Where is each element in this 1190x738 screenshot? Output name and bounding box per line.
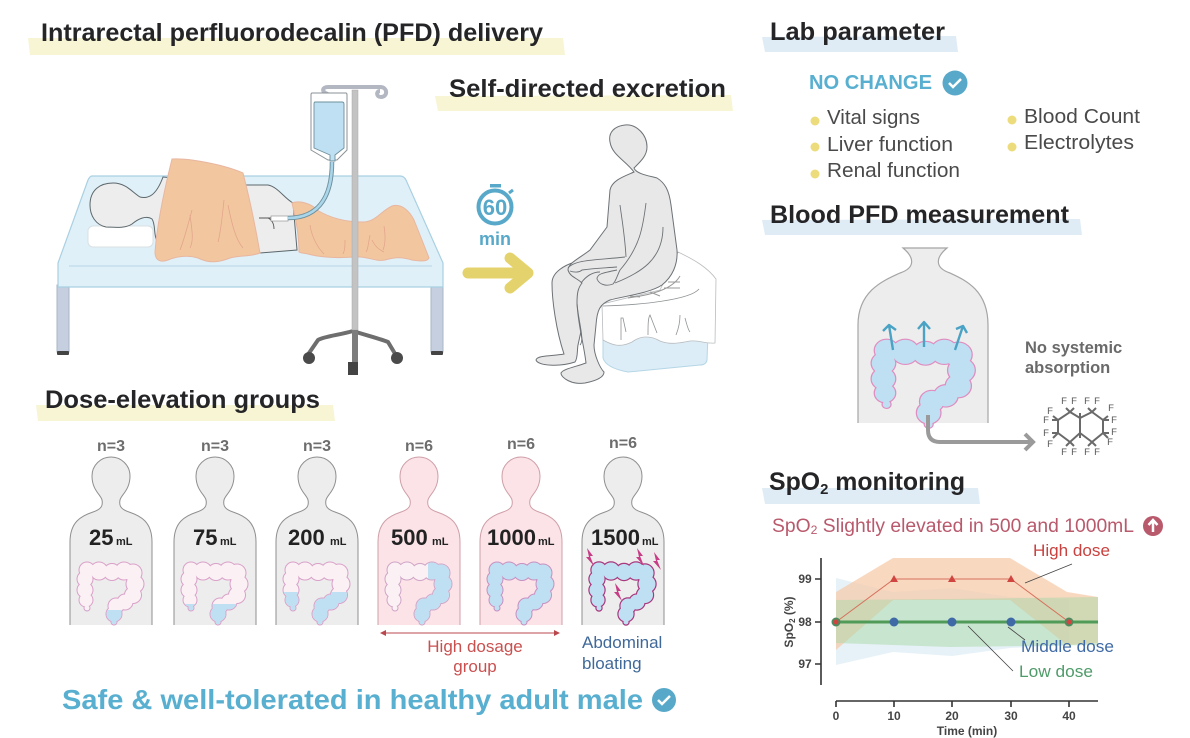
group: 75 mL bbox=[174, 438, 256, 625]
icon: PFD molecule: F bbox=[1111, 427, 1117, 438]
icon: 60 minute stopwatch: min bbox=[479, 229, 511, 249]
label: high dosage group bbox=[380, 630, 560, 676]
icon: PFD molecule: F bbox=[1094, 447, 1100, 458]
list: lab parameters: Liver function bbox=[827, 134, 953, 156]
bed bbox=[57, 176, 443, 355]
group: 200 mL: n=3 bbox=[303, 438, 331, 455]
confidence band: high dose bbox=[836, 558, 1098, 650]
list: lab parameters: Blood Count bbox=[1024, 106, 1140, 128]
label: no systemic absorption: No systemic bbox=[1025, 339, 1122, 357]
confidence band: low dose bbox=[836, 597, 1098, 647]
axis labels: 97 bbox=[798, 657, 812, 671]
group: 25 mL: mL bbox=[116, 536, 133, 548]
commode cover bbox=[602, 252, 716, 345]
icon: PFD molecule bbox=[1043, 396, 1117, 458]
line chart: SpO2 over time bbox=[782, 541, 1114, 738]
icon: PFD molecule: F bbox=[1061, 396, 1067, 407]
low and middle dose series bbox=[832, 618, 1098, 626]
group: 500 mL: n=6 bbox=[405, 438, 433, 455]
icon: PFD molecule: F bbox=[1071, 447, 1077, 458]
excretion arrow bbox=[928, 415, 1033, 450]
group: 25 mL: 25 bbox=[89, 525, 113, 550]
patient body bbox=[90, 177, 297, 253]
axis labels: 30 bbox=[1004, 709, 1018, 723]
illustration: patient on bed with IV bag bbox=[57, 87, 443, 375]
IV stand bbox=[303, 87, 403, 375]
group: 1500 mL bbox=[582, 435, 664, 625]
label: abdominal bloating: bloating bbox=[582, 654, 642, 673]
icon: PFD molecule: F bbox=[1047, 439, 1053, 450]
icon: 60 minute stopwatch: 60 bbox=[483, 195, 507, 220]
blanket: lower bbox=[292, 202, 429, 261]
icon: PFD molecule: F bbox=[1084, 447, 1090, 458]
no change label: NO CHANGE bbox=[809, 72, 932, 94]
group: 1000 mL bbox=[480, 436, 562, 625]
axis labels bbox=[782, 572, 1076, 738]
callout: SpO2 slightly elevated: Slightly elevated in 500 and 1000mL bbox=[817, 516, 1134, 537]
group: 1500 mL: 1500 bbox=[591, 525, 640, 550]
group: 500 mL bbox=[378, 438, 460, 625]
icon: PFD molecule: F bbox=[1107, 437, 1113, 448]
label: high dosage group: High dosage bbox=[427, 637, 523, 656]
group: 200 mL: 200 bbox=[288, 525, 325, 550]
blanket: upper bbox=[155, 159, 260, 262]
axis labels: 40 bbox=[1062, 709, 1076, 723]
illustration: seated person on commode bbox=[536, 125, 716, 383]
icon: PFD molecule: F bbox=[1071, 396, 1077, 407]
axis labels: 10 bbox=[887, 709, 901, 723]
group: 200 mL bbox=[276, 438, 358, 625]
absorption arrows bbox=[883, 322, 967, 350]
icon: PFD molecule: F bbox=[1043, 415, 1049, 426]
torso bbox=[858, 248, 988, 423]
confidence band: middle dose bbox=[836, 578, 1069, 665]
group: 1500 mL: mL bbox=[642, 536, 659, 548]
group: 1500 mL: n=6 bbox=[609, 435, 637, 452]
group: 75 mL: mL bbox=[220, 536, 237, 548]
heading: Self-directed excretion: Self-directed excretion bbox=[449, 75, 726, 103]
list: lab parameters: Vital signs bbox=[827, 107, 920, 129]
series labels: Low dose bbox=[1019, 662, 1093, 681]
group: 500 mL: 500 bbox=[391, 525, 428, 550]
label: high dosage group: group bbox=[453, 657, 497, 676]
group: 75 mL: 75 bbox=[193, 525, 217, 550]
person: head, torso and near leg bbox=[561, 125, 677, 383]
icon: PFD molecule: F bbox=[1084, 396, 1090, 407]
conclusion: safe and well tolerated: Safe & well-tolerated in healthy adult male bbox=[62, 684, 643, 715]
icon: PFD molecule: F bbox=[1094, 396, 1100, 407]
axis labels: 20 bbox=[945, 709, 959, 723]
heading: Dose-elevation groups: Dose-elevation groups bbox=[45, 386, 320, 414]
heading: SpO2 monitoring: monitoring bbox=[828, 468, 965, 496]
axis labels: SpO bbox=[782, 623, 796, 648]
heading: Blood PFD measurement: Blood PFD measurement bbox=[770, 201, 1070, 229]
group: 500 mL: mL bbox=[432, 536, 449, 548]
pillow bbox=[88, 226, 153, 247]
icon: PFD molecule: F bbox=[1047, 406, 1053, 417]
icon: PFD molecule: F bbox=[1061, 447, 1067, 458]
arrow: to excretion bbox=[468, 258, 528, 288]
group: 75 mL: n=3 bbox=[201, 438, 229, 455]
group: 1000 mL: mL bbox=[538, 536, 555, 548]
heading: SpO2 monitoring: SpO bbox=[769, 468, 820, 496]
high dose series bbox=[836, 575, 1069, 622]
series labels: High dose bbox=[1033, 541, 1110, 560]
callout: SpO2 slightly elevated: 2 bbox=[811, 523, 818, 537]
axis labels: (%) bbox=[782, 596, 796, 618]
axis labels: 98 bbox=[798, 615, 812, 629]
illustration: torso with colon and blood PFD bbox=[858, 248, 1033, 450]
axes bbox=[815, 558, 1098, 707]
callout: SpO2 slightly elevated: SpO bbox=[772, 516, 810, 537]
heading: Intrarectal PFD delivery: Intrarectal perfluorodecalin (PFD) delivery bbox=[41, 19, 543, 47]
group: 200 mL: mL bbox=[330, 536, 347, 548]
list: lab parameters: Renal function bbox=[827, 160, 960, 182]
series labels bbox=[968, 541, 1114, 681]
group: 1000 mL: 1000 bbox=[487, 525, 536, 550]
axis labels: 99 bbox=[798, 572, 812, 586]
label: abdominal bloating bbox=[582, 633, 662, 673]
heading: Lab parameter: Lab parameter bbox=[770, 18, 945, 46]
icon: PFD molecule: F bbox=[1043, 428, 1049, 439]
heading: SpO2 monitoring: 2 bbox=[820, 481, 828, 498]
axis labels: Time (min) bbox=[937, 724, 997, 738]
list: lab parameters: Electrolytes bbox=[1024, 132, 1134, 154]
heading: SpO2 monitoring bbox=[762, 468, 980, 504]
list: lab parameters bbox=[810, 106, 1140, 182]
IV bag bbox=[311, 93, 347, 161]
group: 25 mL bbox=[70, 438, 152, 625]
icon: PFD molecule: F bbox=[1111, 415, 1117, 426]
series labels: Middle dose bbox=[1021, 637, 1114, 656]
commode base bbox=[603, 335, 708, 372]
icon: 60 minute stopwatch bbox=[478, 184, 513, 249]
label: abdominal bloating: Abdominal bbox=[582, 633, 662, 652]
group: 1000 mL: n=6 bbox=[507, 436, 535, 453]
person: far leg bbox=[536, 262, 590, 365]
group: 25 mL: n=3 bbox=[97, 438, 125, 455]
no change label bbox=[809, 70, 968, 96]
icon: PFD molecule: F bbox=[1108, 403, 1114, 414]
label: no systemic absorption bbox=[1025, 339, 1122, 377]
label: no systemic absorption: absorption bbox=[1025, 359, 1110, 377]
axis labels: 2 bbox=[788, 618, 797, 623]
anatomical buttock line and rectal tube bbox=[259, 162, 332, 229]
colon bbox=[872, 340, 975, 428]
axis labels: 0 bbox=[833, 709, 840, 723]
